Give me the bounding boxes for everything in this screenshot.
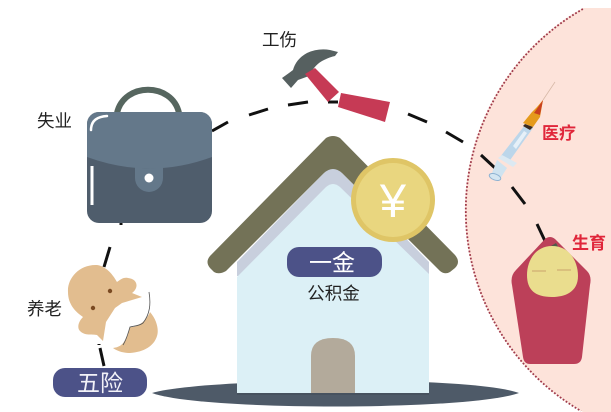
eyes [108,289,112,293]
text: 医疗: 医疗 [542,123,576,143]
icon: ground shadow [152,381,519,406]
roof [208,136,458,273]
text: 失业: 失业 [37,111,72,131]
badge: 五险: 五险 [77,370,123,396]
panel: pink circle background [465,8,611,412]
icon: yen coin [351,158,435,242]
badge: 一金: 一金 [309,250,355,276]
walls [237,184,429,394]
icon: yen coin: ¥ [379,174,407,227]
icon: swaddled baby [512,237,591,364]
door [311,338,355,394]
icon: syringe [488,82,555,182]
text: 养老: 养老 [27,299,62,319]
text: 生育: 生育 [572,233,606,253]
icon: house [208,136,458,395]
icon: briefcase [87,90,212,223]
icon: elderly face [68,265,158,353]
moustache shading [123,292,150,345]
text: 工伤: 工伤 [262,30,297,50]
dashed connecting arc [99,102,545,366]
wall base [237,393,429,395]
badge: 一金 [287,247,382,277]
icon: hammer [282,49,390,122]
badge: 五险 [53,368,147,397]
roof underside [237,168,429,276]
head [68,265,142,341]
text: 公积金: 公积金 [307,284,360,304]
chin [113,312,158,353]
